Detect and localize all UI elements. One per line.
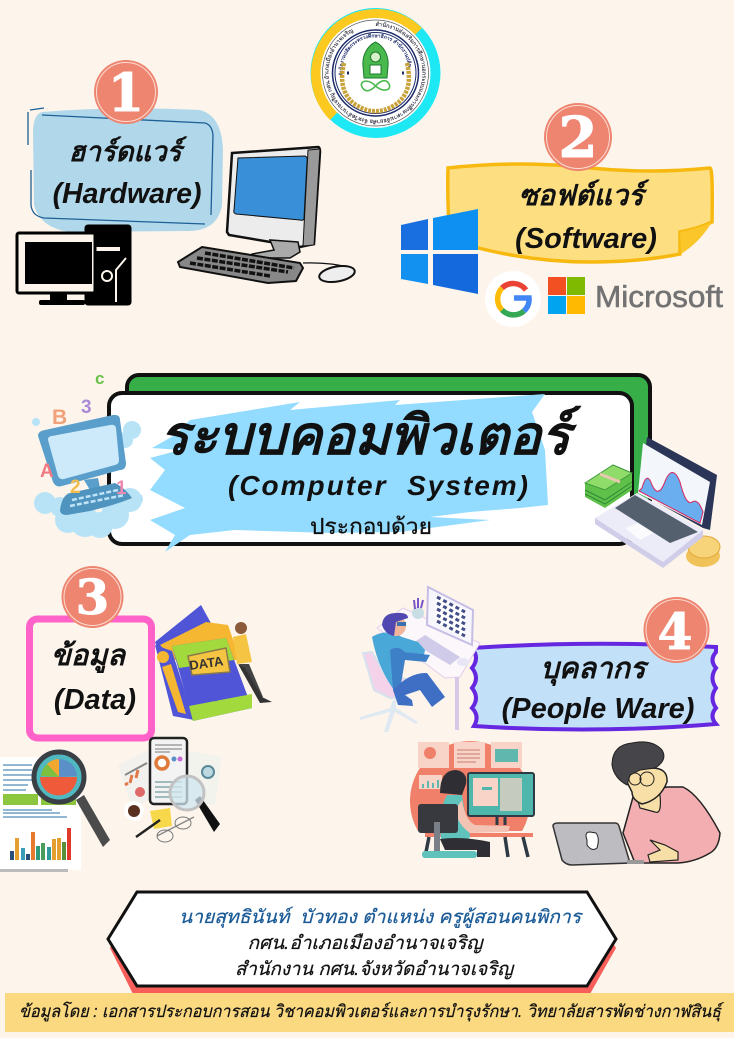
heading: data thai: ข้อมูล	[51, 640, 127, 674]
panel outline strokes	[28, 108, 213, 224]
cash stack	[585, 465, 632, 508]
badge 3	[62, 566, 124, 628]
heading: software english: (Software)	[515, 223, 657, 255]
badge 1	[94, 60, 158, 124]
badge 3: 3	[76, 570, 109, 626]
heading: data english: (Data)	[54, 684, 136, 716]
letters around monitor: 2	[70, 477, 81, 498]
letters around monitor: B	[52, 406, 67, 429]
white front card	[109, 393, 632, 544]
yellow ribbon	[448, 164, 712, 262]
ribbon fold	[680, 222, 712, 254]
wavy frame	[472, 644, 716, 730]
icon: magnifier over report	[0, 752, 110, 872]
heading: hardware english: (Hardware)	[53, 178, 201, 210]
heading: people thai: บุคลากร	[540, 653, 650, 687]
letters around monitor: A	[40, 461, 54, 482]
panel: title	[109, 375, 650, 552]
panel: hardware	[28, 60, 223, 232]
blue brush stroke	[150, 394, 548, 552]
logo emblem	[310, 8, 440, 138]
coins	[686, 545, 720, 567]
panel: people ware	[472, 597, 716, 730]
laptop screen	[640, 437, 717, 530]
panel: data	[30, 566, 152, 738]
icon: google logo	[485, 271, 541, 327]
white hexagon	[108, 892, 616, 986]
logo emblem: สำนักงานปลัดกระทรวงศึกษาธิการ สำนักงานปลัด	[338, 34, 412, 76]
main title thai: ระบบคอมพิวเตอร์	[160, 405, 582, 466]
heading: hardware thai: ฮาร์ดแวร์	[69, 136, 187, 167]
letters around monitor: c	[95, 369, 104, 388]
icon: laptop with cash and coins	[585, 437, 720, 568]
icon: phone and analytics papers	[118, 738, 222, 842]
icon: data book with person: DATA	[188, 653, 225, 673]
title english: (Computer System)	[228, 470, 528, 501]
blue brushed panel	[33, 108, 223, 232]
author province: สำนักงาน กศน.จังหวัดอำนาจเจริญ	[235, 958, 515, 980]
icon: cartoon monitor with letters	[32, 369, 143, 538]
logo emblem: สำนักงานส่งเสริมการศึกษานอกระบบและการศึกษาตามอัธยาศัย จังหวัดอำนาจเจริญ กศน.อำเภอเมืองอำนาจเจริญ	[324, 22, 426, 125]
letters around monitor: 3	[81, 397, 92, 418]
panel: author box	[108, 892, 616, 994]
icon: microsoft logo: Microsoft	[595, 279, 723, 314]
icon: man with laptop	[553, 742, 720, 865]
letters around monitor	[40, 369, 127, 499]
pink frame	[30, 619, 152, 738]
red shadow	[110, 900, 616, 994]
author office: กศน.อำเภอเมืองอำนาจเจริญ	[248, 932, 485, 954]
icon: data book with person	[155, 605, 272, 721]
badge 2: 2	[559, 105, 597, 171]
green back card	[127, 375, 650, 540]
source footer bar	[5, 993, 734, 1032]
icon: windows logo	[401, 209, 478, 294]
badge 1: 1	[108, 63, 144, 124]
heading: software thai: ซอฟต์แวร์	[519, 179, 650, 212]
letters around monitor: 1	[116, 478, 127, 499]
laptop base	[595, 493, 703, 562]
badge 2	[544, 103, 612, 171]
subtitle: ประกอบด้วย	[310, 514, 432, 539]
badge 4	[644, 597, 710, 663]
author name: นายสุทธินันท์ บัวทอง ตำแหน่ง ครูผู้สอนคนพิการ	[179, 906, 583, 928]
icon: crt computer	[178, 147, 356, 285]
icon: desktop computer black	[17, 225, 131, 305]
icon: woman at monitor	[410, 741, 534, 858]
heading: people english: (People Ware)	[502, 693, 694, 725]
icon: developer at desk	[360, 587, 480, 732]
icon: microsoft logo	[548, 277, 723, 314]
panel: software	[448, 103, 712, 262]
badge 4: 4	[658, 602, 692, 661]
